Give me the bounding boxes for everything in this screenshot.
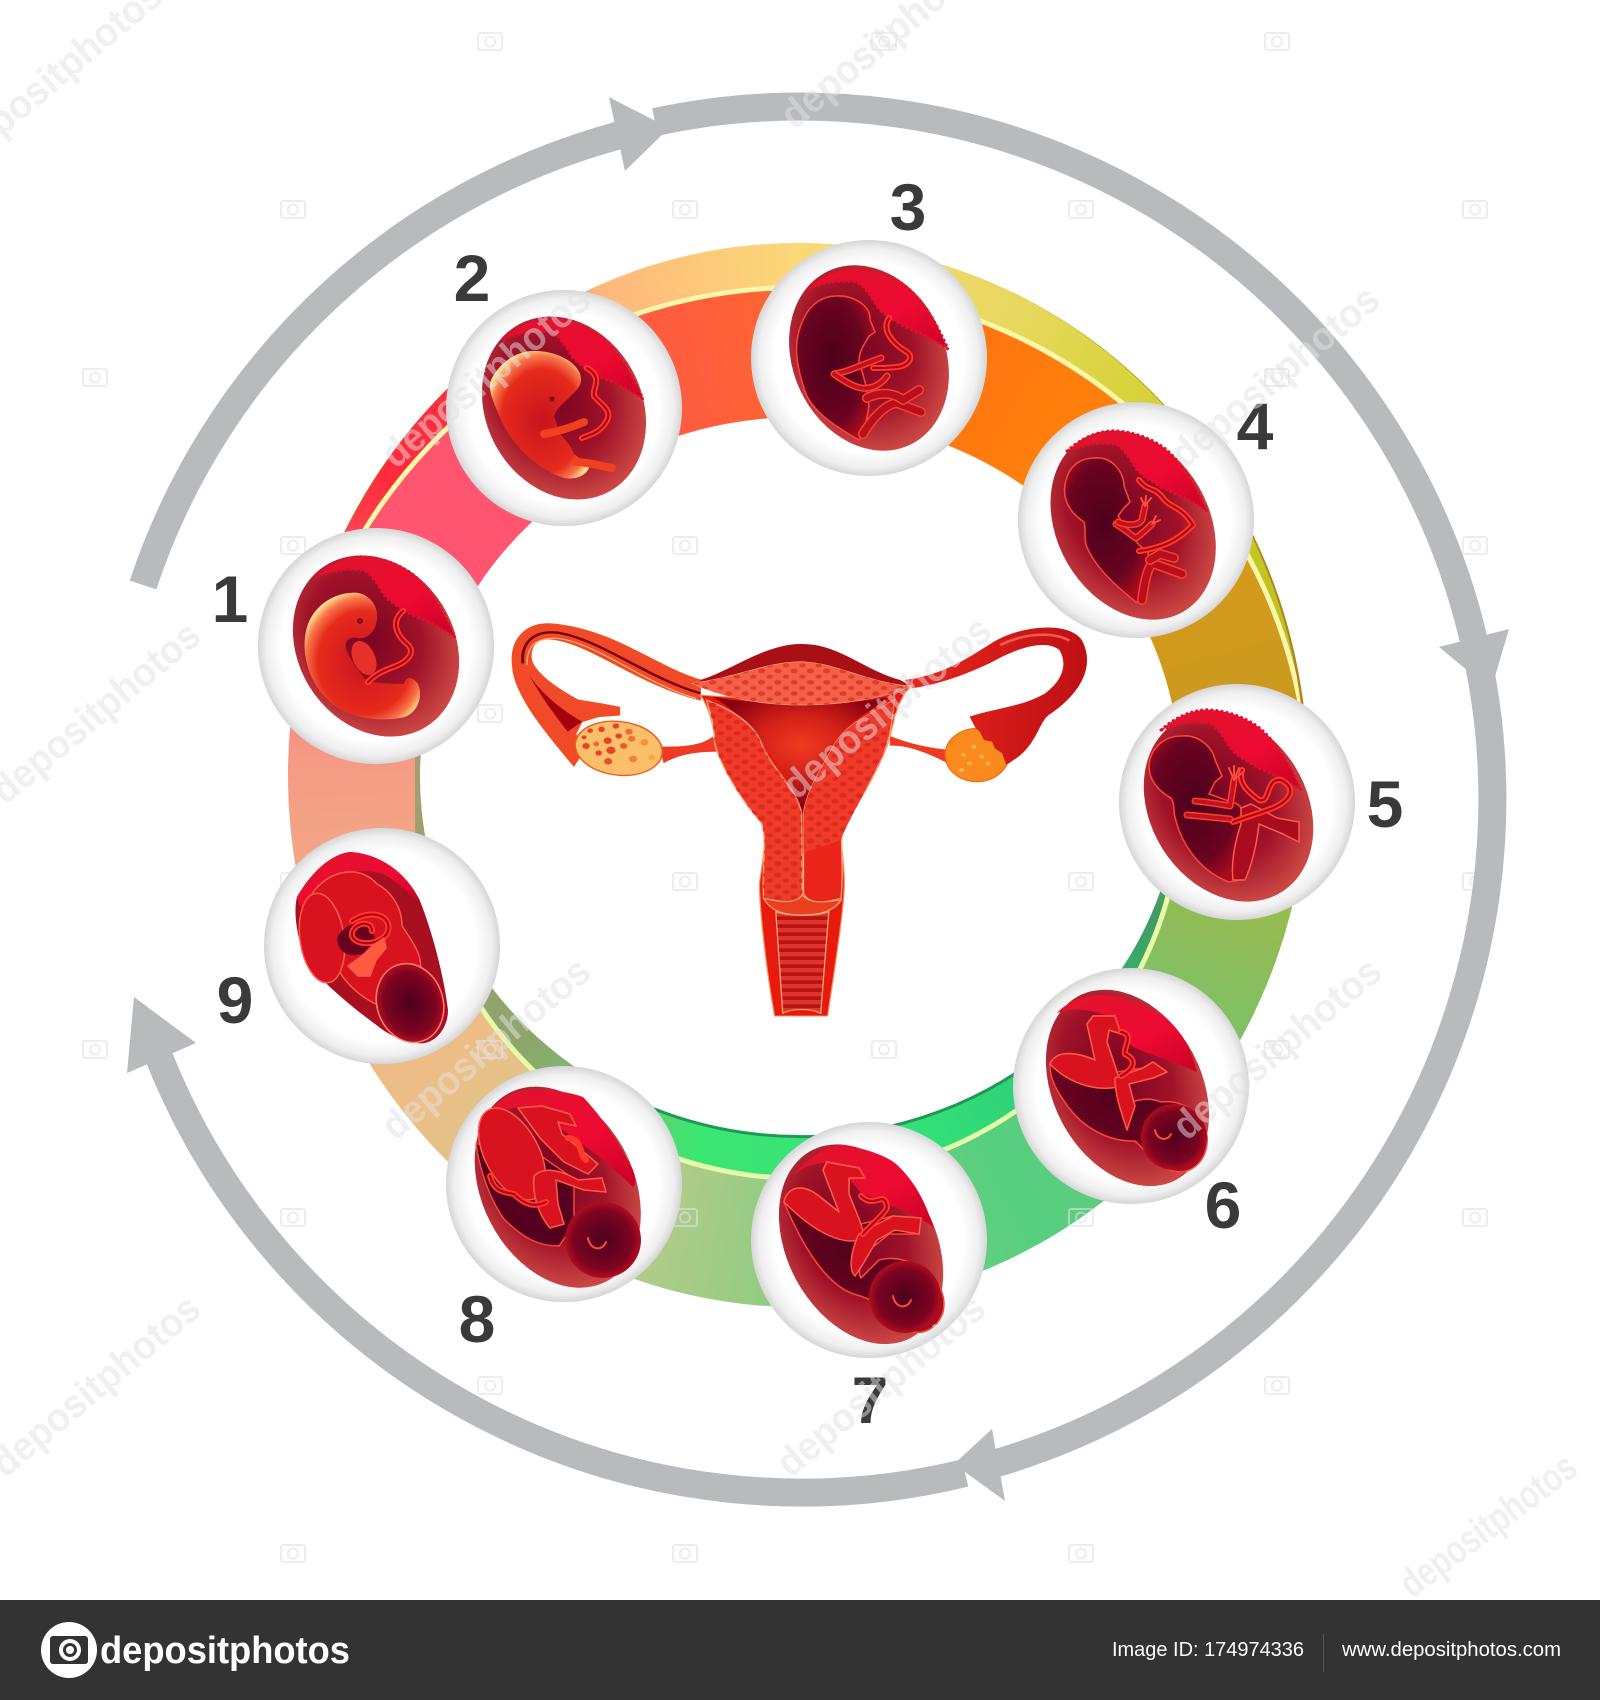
stock photo watermarks: depositphotos <box>1164 949 1390 1148</box>
uterus body <box>700 685 912 1016</box>
website url: www.depositphotos.com <box>1341 1639 1561 1661</box>
right fallopian tube <box>904 628 1087 765</box>
stage numbers: 7 <box>852 1363 888 1437</box>
stage numbers <box>212 170 1403 1437</box>
left wall <box>706 700 802 903</box>
footer bar <box>0 1600 1600 1700</box>
right ligament <box>890 736 951 765</box>
colour gradient ring <box>288 243 1308 1307</box>
watermark camera icons <box>83 33 1487 1562</box>
stage 5 fetus <box>1109 681 1355 933</box>
image id: Image ID: 174974336 <box>1112 1639 1304 1661</box>
stage 6 fetus <box>1013 961 1249 1214</box>
stage numbers: 3 <box>890 170 926 244</box>
stage 1 embryo <box>258 524 494 768</box>
vaginal canal <box>776 912 829 1013</box>
right ovary <box>945 728 1009 782</box>
stage 8 fetus <box>442 1058 682 1316</box>
fundus <box>700 644 912 687</box>
stage numbers: 5 <box>1367 767 1403 841</box>
vaginal fornix <box>764 895 841 915</box>
left fallopian tube <box>512 624 700 766</box>
stage numbers: 6 <box>1205 1168 1241 1242</box>
logo wordmark: depositphotos <box>100 1630 350 1672</box>
endometrium top <box>692 662 912 705</box>
left ovary with follicles <box>569 715 669 782</box>
stock photo watermarks: depositphotos <box>768 1286 994 1485</box>
stage 9 fetus <box>264 828 500 1064</box>
dark green inner ring edge <box>640 1052 1045 1137</box>
stock photo watermarks: depositphotos <box>373 277 599 476</box>
stage numbers: 4 <box>1237 389 1274 463</box>
stage numbers: 1 <box>212 562 248 636</box>
white centre of ring <box>420 417 1180 1137</box>
left ligament <box>660 737 721 763</box>
uterine cavity <box>713 697 890 813</box>
divider <box>1323 1634 1324 1672</box>
uterus anatomy <box>512 624 1087 1016</box>
stage numbers: 8 <box>459 1282 495 1356</box>
saturated inner band <box>368 290 1297 1175</box>
arrow: right to bottom <box>954 650 1492 1501</box>
arrow: lower left to top <box>143 97 669 585</box>
icon: camera logo <box>41 1622 97 1678</box>
stock photo watermarks: depositphotos <box>774 608 1000 807</box>
stage numbers: 2 <box>454 241 490 315</box>
stage 3 fetus <box>751 239 987 477</box>
right wall <box>804 700 894 902</box>
arrow: top to right <box>655 107 1509 690</box>
stock photo watermarks: depositphotos <box>1162 277 1388 476</box>
arrow: bottom to lower left <box>127 997 965 1493</box>
stock photo watermarks: depositphotos <box>373 949 599 1148</box>
stage 2 embryo <box>446 288 682 528</box>
stage 7 fetus <box>746 1116 987 1373</box>
stage numbers: 9 <box>217 963 253 1037</box>
stage 4 fetus <box>1017 400 1254 650</box>
